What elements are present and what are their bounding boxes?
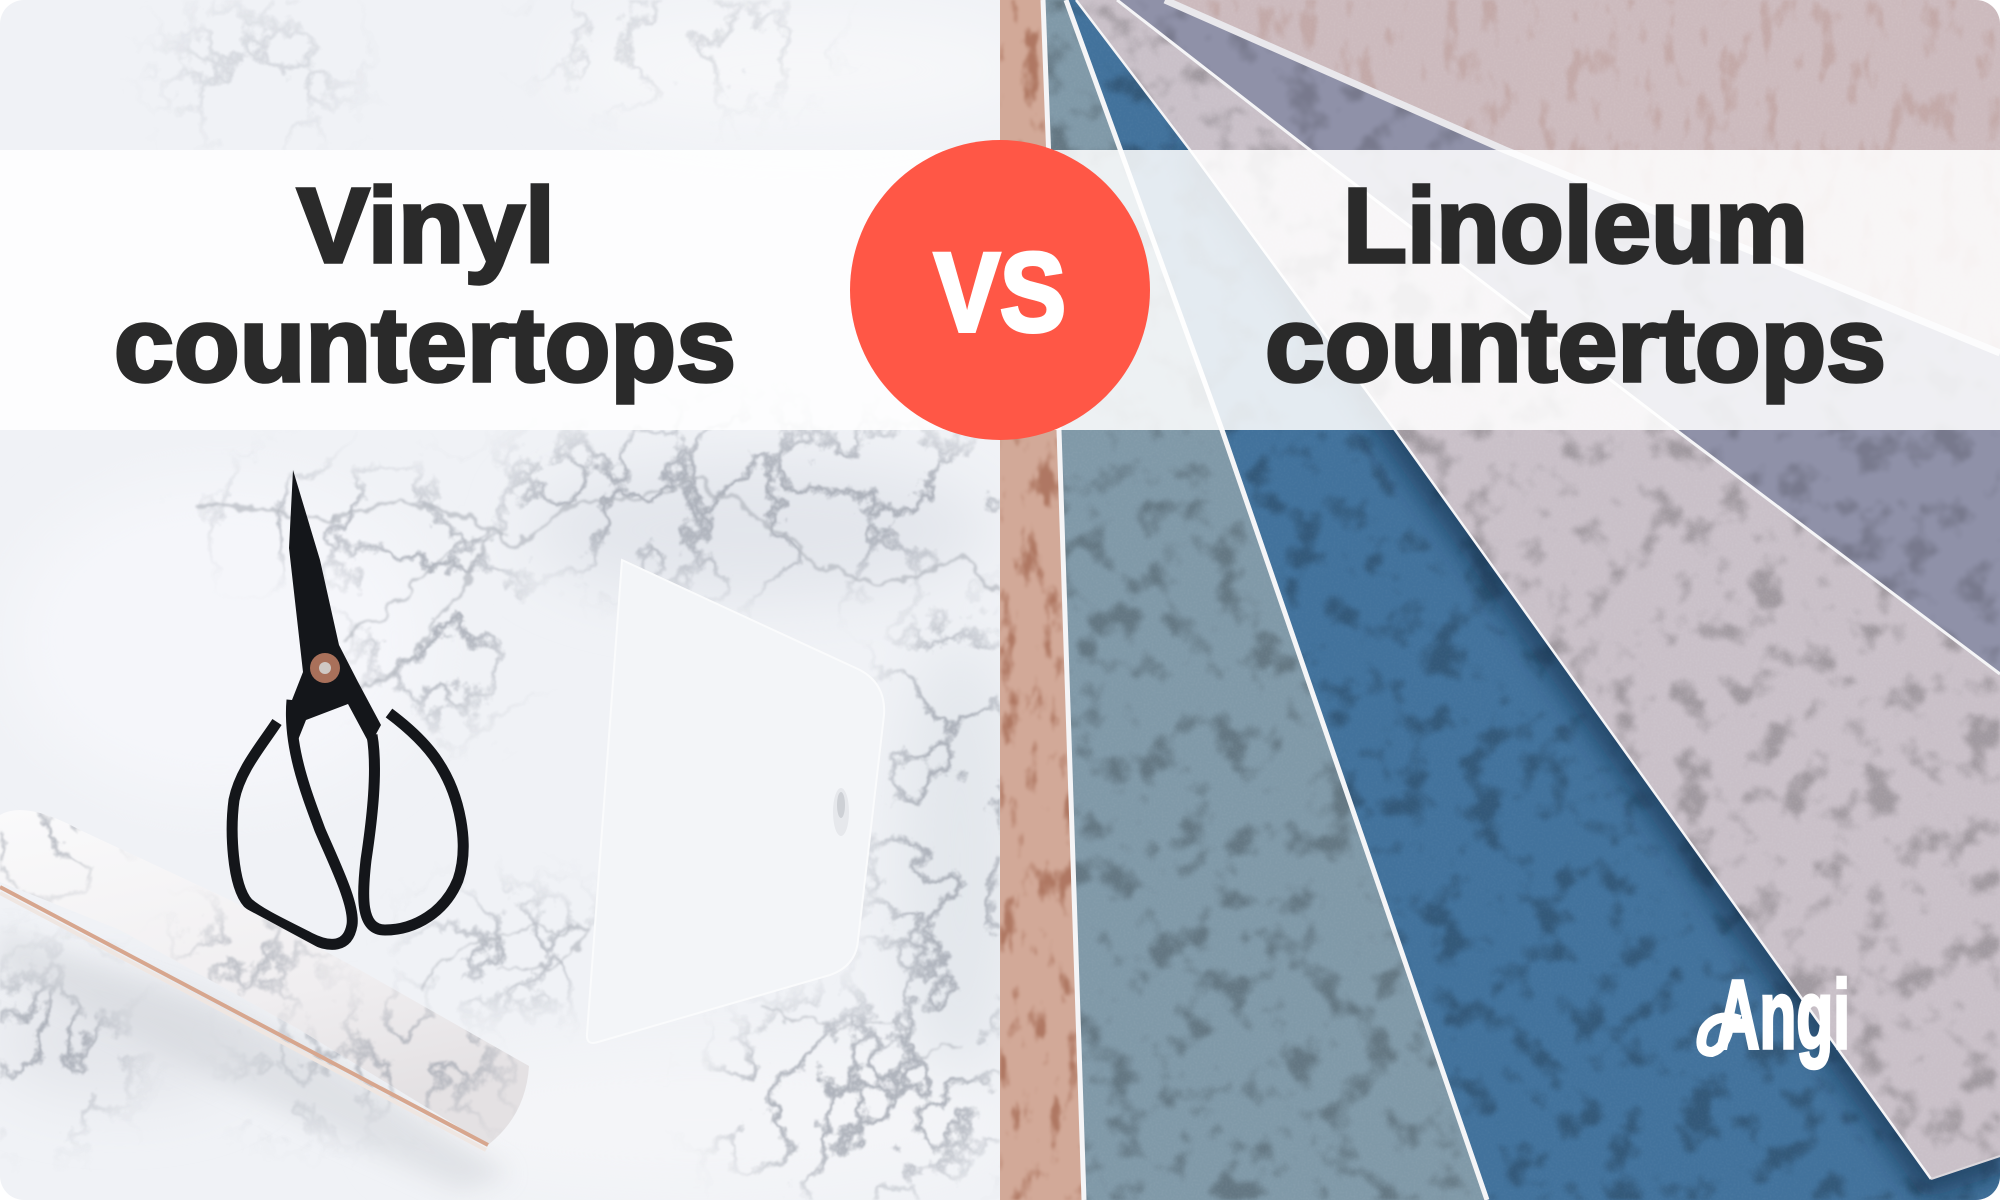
panel: vinyl marble photo bbox=[0, 0, 1040, 1200]
scissor arm right loop bbox=[364, 713, 463, 930]
sample: teal grey bbox=[1046, 0, 1484, 1200]
logo: Angi bbox=[1701, 960, 1850, 1069]
vs badge: VS bbox=[934, 230, 1066, 355]
sample: deep blue bbox=[1000, 0, 2000, 1200]
sample: pink strip bbox=[1000, 0, 1082, 1200]
marble veins bbox=[200, 480, 1000, 1060]
heading: vinyl countertops bbox=[114, 167, 736, 404]
scissor arm left loop bbox=[232, 700, 352, 944]
vs badge bbox=[850, 140, 1150, 440]
panel: linoleum sample fan photo bbox=[1000, 0, 2000, 1200]
icon: scissors bbox=[232, 470, 463, 944]
heading: linoleum countertops: Linoleum bbox=[1343, 167, 1808, 285]
heading: vinyl countertops: countertops bbox=[114, 286, 736, 404]
sample edges bbox=[1043, 0, 2000, 1200]
marble vein network bbox=[0, 0, 1020, 1190]
vinyl scraper sheet bbox=[587, 560, 884, 1043]
scissor pivot bbox=[310, 653, 340, 683]
marble cloud shading bbox=[21, 470, 1000, 1084]
sample: slate grey bbox=[1120, 0, 2000, 672]
sample: light mauve bbox=[1000, 0, 2000, 1200]
title band bbox=[0, 150, 2000, 430]
sample: top mauve bbox=[1174, 0, 2000, 349]
logo: Angi: Angi bbox=[1716, 960, 1850, 1069]
scissor blade bbox=[289, 470, 381, 745]
heading: vinyl countertops: Vinyl bbox=[297, 167, 555, 285]
heading: linoleum countertops bbox=[1265, 167, 1886, 404]
heading: linoleum countertops: countertops bbox=[1265, 286, 1886, 404]
vinyl roll bbox=[0, 790, 529, 1150]
shadow under roll bbox=[0, 930, 510, 1190]
